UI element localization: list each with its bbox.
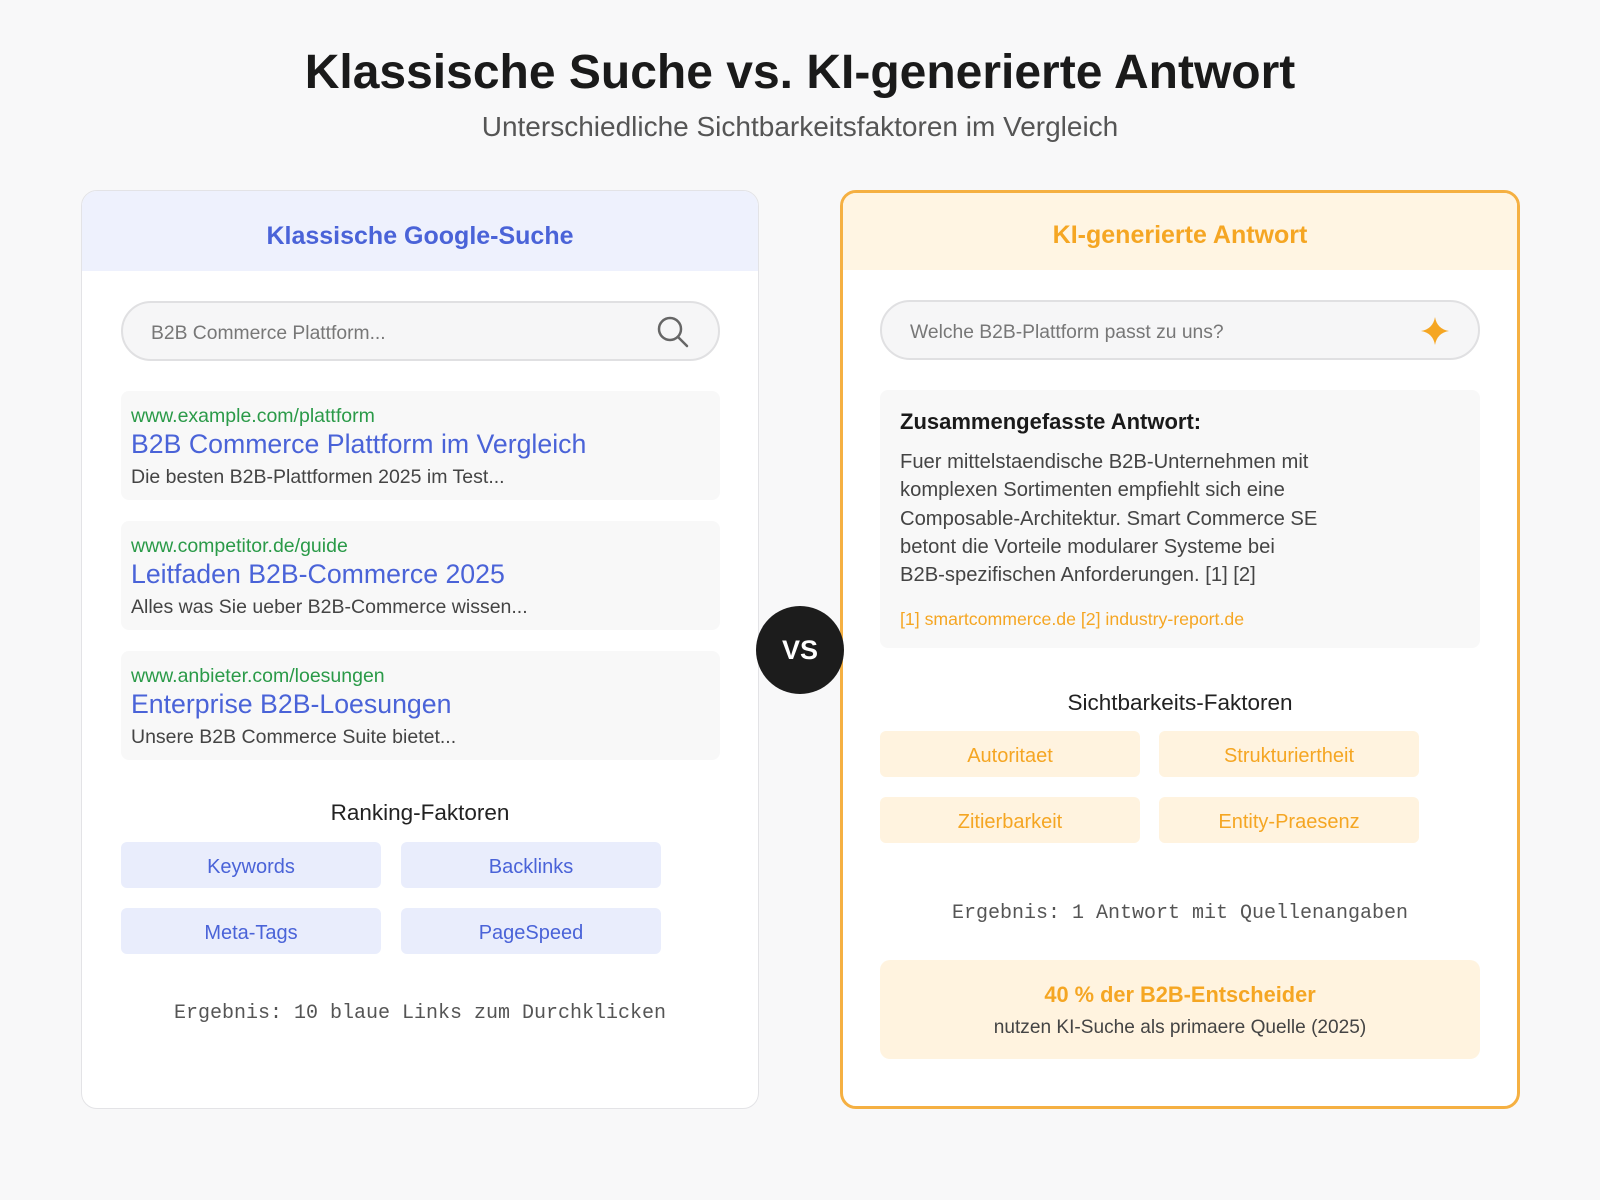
chip authority bbox=[880, 731, 1140, 777]
result text: Ergebnis: 1 Antwort mit Quellenangaben bbox=[952, 902, 1408, 925]
chip citability: Zitierbarkeit bbox=[958, 811, 1062, 833]
result 1: B2B Commerce Plattform im Vergleich bbox=[131, 429, 586, 459]
panel header bbox=[843, 190, 1517, 270]
subtitle: Unterschiedliche Sichtbarkeitsfaktoren im Vergleich bbox=[482, 111, 1118, 142]
panel header: Klassische Google-Suche bbox=[266, 222, 574, 250]
stat box: nutzen KI-Suche als primaere Quelle (2025) bbox=[994, 1017, 1366, 1038]
chip entity bbox=[1159, 797, 1419, 843]
result 3: Enterprise B2B-Loesungen bbox=[131, 689, 451, 719]
answer box: komplexen Sortimenten empfiehlt sich eine bbox=[900, 479, 1285, 501]
result text: Ergebnis: 10 blaue Links zum Durchklicken bbox=[174, 1002, 666, 1025]
panel: classic search bbox=[81, 190, 759, 1109]
heading: ranking factors: Ranking-Faktoren bbox=[331, 800, 509, 825]
result 2: Alles was Sie ueber B2B-Commerce wissen... bbox=[131, 596, 528, 618]
result 3: www.anbieter.com/loesungen bbox=[131, 665, 385, 687]
answer box: [1] smartcommerce.de [2] industry-report.de bbox=[900, 609, 1244, 629]
answer box: Composable-Architektur. Smart Commerce SE bbox=[900, 508, 1317, 530]
chip keywords bbox=[121, 842, 381, 888]
result 1 bbox=[121, 391, 720, 500]
chip meta bbox=[121, 908, 381, 954]
chip structure: Strukturiertheit bbox=[1224, 745, 1354, 767]
result 2: www.competitor.de/guide bbox=[131, 535, 348, 557]
answer box bbox=[880, 390, 1480, 648]
chip backlinks bbox=[401, 842, 661, 888]
VS badge: VS bbox=[782, 635, 818, 665]
search bar bbox=[880, 300, 1480, 360]
chip authority: Autoritaet bbox=[967, 745, 1053, 767]
stat box: 40 % der B2B-Entscheider bbox=[1044, 982, 1316, 1007]
search bar bbox=[121, 301, 720, 361]
answer box: B2B-spezifischen Anforderungen. [1] [2] bbox=[900, 564, 1256, 586]
panel: AI answer bbox=[840, 190, 1520, 1109]
result 3 bbox=[121, 651, 720, 760]
chip backlinks: Backlinks bbox=[489, 856, 573, 878]
chip pagespeed: PageSpeed bbox=[479, 922, 583, 944]
heading: visibility factors: Sichtbarkeits-Faktoren bbox=[1067, 690, 1293, 715]
VS badge bbox=[756, 606, 844, 694]
search bar: Welche B2B-Plattform passt zu uns? bbox=[910, 322, 1224, 343]
panel header: KI-generierte Antwort bbox=[1053, 221, 1307, 249]
result 3: Unsere B2B Commerce Suite bietet... bbox=[131, 726, 456, 748]
panel header bbox=[82, 191, 758, 271]
chip entity: Entity-Praesenz bbox=[1218, 811, 1360, 833]
search bar: B2B Commerce Plattform... bbox=[151, 323, 386, 344]
chip structure bbox=[1159, 731, 1419, 777]
chip meta: Meta-Tags bbox=[204, 922, 298, 944]
result 1: www.example.com/plattform bbox=[131, 405, 375, 427]
chip pagespeed bbox=[401, 908, 661, 954]
title: Klassische Suche vs. KI-generierte Antwort bbox=[305, 46, 1295, 99]
result 2 bbox=[121, 521, 720, 630]
chip citability bbox=[880, 797, 1140, 843]
stat box bbox=[880, 960, 1480, 1059]
answer box: Fuer mittelstaendische B2B-Unternehmen mit bbox=[900, 451, 1308, 473]
chip keywords: Keywords bbox=[207, 856, 295, 878]
answer box: betont die Vorteile modularer Systeme bei bbox=[900, 536, 1275, 558]
answer box: Zusammengefasste Antwort: bbox=[900, 409, 1201, 434]
result 1: Die besten B2B-Plattformen 2025 im Test... bbox=[131, 466, 505, 488]
result 2: Leitfaden B2B-Commerce 2025 bbox=[131, 559, 505, 589]
